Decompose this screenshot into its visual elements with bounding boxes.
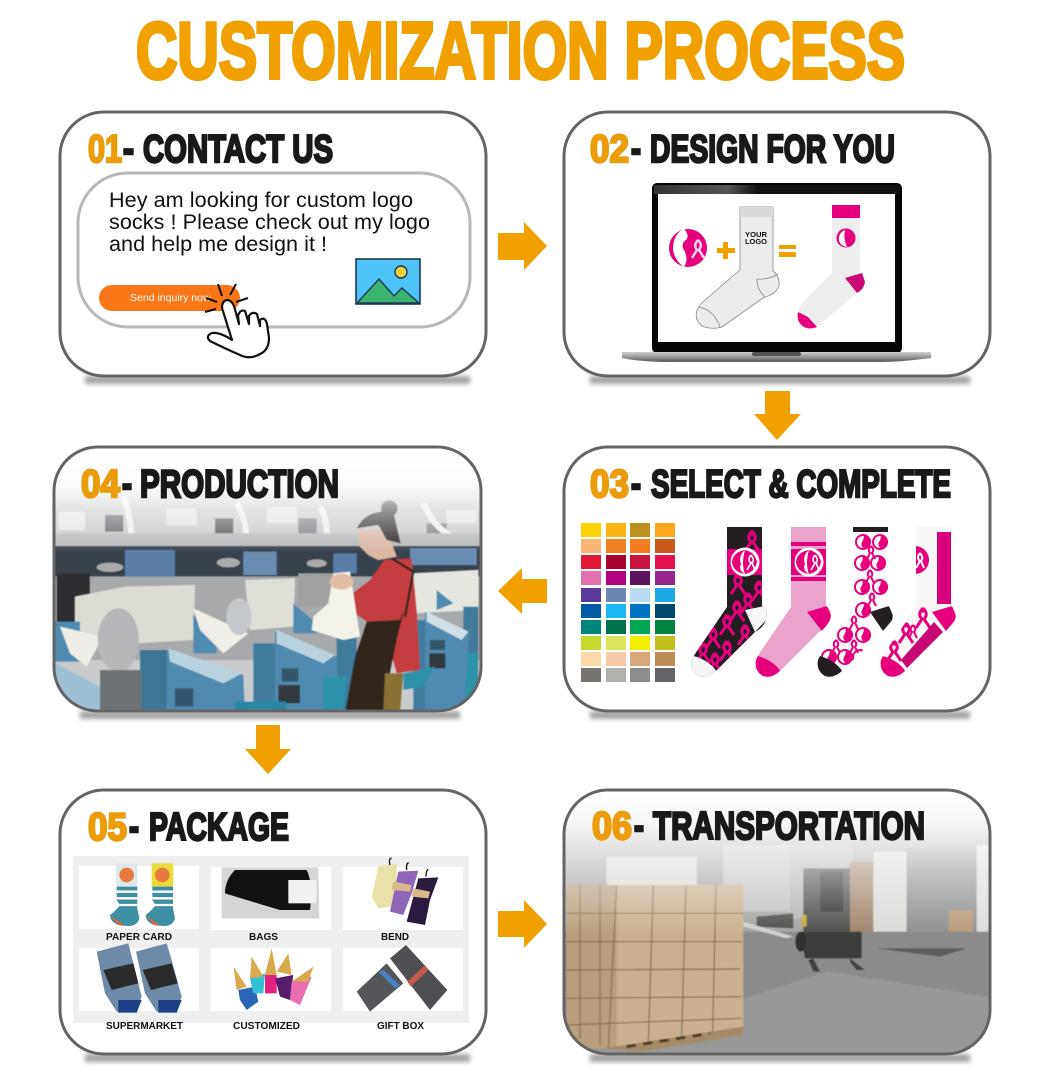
warehouse yard photo (566, 823, 988, 1052)
panel: 04 production (50, 440, 490, 719)
package options grid: BAGS (249, 931, 278, 943)
panel: 02 design for you (564, 112, 990, 384)
heading: 06 transportation (592, 805, 925, 848)
package options grid: CUSTOMIZED (233, 1020, 300, 1032)
package options grid: BEND (381, 931, 409, 943)
colour swatches (581, 523, 675, 682)
heading: 04 production: - (122, 463, 132, 506)
sock: white with pink panel (880, 532, 956, 677)
sock: white with logo pattern (818, 527, 893, 677)
icon: image placeholder (356, 259, 420, 304)
option: supermarket (97, 943, 182, 1013)
blank sock with your logo: YOUR (745, 230, 768, 239)
heading: 03 select and complete: 03 (590, 463, 629, 506)
sock: pink with band (756, 527, 831, 677)
heading: 01 contact us: - (123, 128, 134, 171)
package options grid: PAPER CARD (106, 931, 172, 943)
heading: 02 design for you: 02 (590, 128, 629, 171)
equals sign (779, 245, 796, 257)
laptop (622, 183, 931, 362)
option: bags (222, 867, 319, 918)
blank sock with your logo (696, 207, 779, 328)
package options grid (73, 856, 469, 1032)
heading: 06 transportation: - (634, 805, 644, 848)
arrow: 02 to 03 (754, 391, 801, 440)
heading: 02 design for you (590, 128, 895, 171)
option: bend (372, 858, 438, 925)
heading: 06 transportation: 06 (592, 805, 632, 848)
message bubble: Hey am looking for custom logo (109, 187, 413, 212)
heading: 06 transportation: TRANSPORTATION (653, 805, 925, 848)
arrow: 03 to 04 (498, 568, 547, 614)
heading: 03 select and complete: - (631, 463, 641, 506)
icon: pink logo (669, 229, 707, 267)
icon: clicking hand (205, 284, 269, 357)
send inquiry button (99, 285, 240, 311)
message bubble (78, 173, 470, 327)
heading: 05 package: 05 (88, 806, 127, 849)
heading: 01 contact us: CONTACT US (143, 128, 333, 171)
heading: 01 contact us (88, 128, 333, 171)
arrow: 05 to 06 (498, 900, 547, 948)
factory photo (56, 490, 480, 710)
heading: 03 select and complete: SELECT & COMPLETE (651, 463, 951, 506)
heading: 04 production: 04 (81, 463, 120, 506)
heading: 05 package: - (129, 806, 139, 849)
panel: 06 transportation (560, 785, 1000, 1062)
arrow: 01 to 02 (498, 222, 547, 270)
message bubble: and help me design it ! (109, 231, 327, 256)
finished pink sock (798, 205, 865, 328)
plus sign (717, 242, 735, 259)
package options grid: GIFT BOX (377, 1020, 424, 1032)
send inquiry button: Send inquiry now (130, 292, 211, 304)
blank sock with your logo: LOGO (745, 237, 767, 246)
option: customized (233, 948, 313, 1010)
heading: 03 select and complete (590, 463, 951, 506)
heading: 05 package: PACKAGE (149, 806, 289, 849)
panel: 03 select and complete (564, 447, 990, 719)
option: gift box (357, 945, 447, 1012)
heading: 04 production (81, 463, 339, 506)
option: paper card (110, 863, 175, 926)
heading: 04 production: PRODUCTION (140, 463, 339, 506)
package options grid: SUPERMARKET (106, 1020, 184, 1032)
sock: black with ribbons (692, 527, 767, 677)
heading: 05 package (88, 806, 289, 849)
heading: 01 contact us: 01 (88, 128, 122, 171)
panel: 01 contact us (60, 112, 486, 384)
arrow: 04 to 05 (245, 725, 291, 774)
heading: 02 design for you: DESIGN FOR YOU (650, 128, 895, 171)
heading: 02 design for you: - (631, 128, 641, 171)
message bubble: socks ! Please check out my logo (109, 209, 430, 234)
panel: 05 package (60, 790, 486, 1062)
